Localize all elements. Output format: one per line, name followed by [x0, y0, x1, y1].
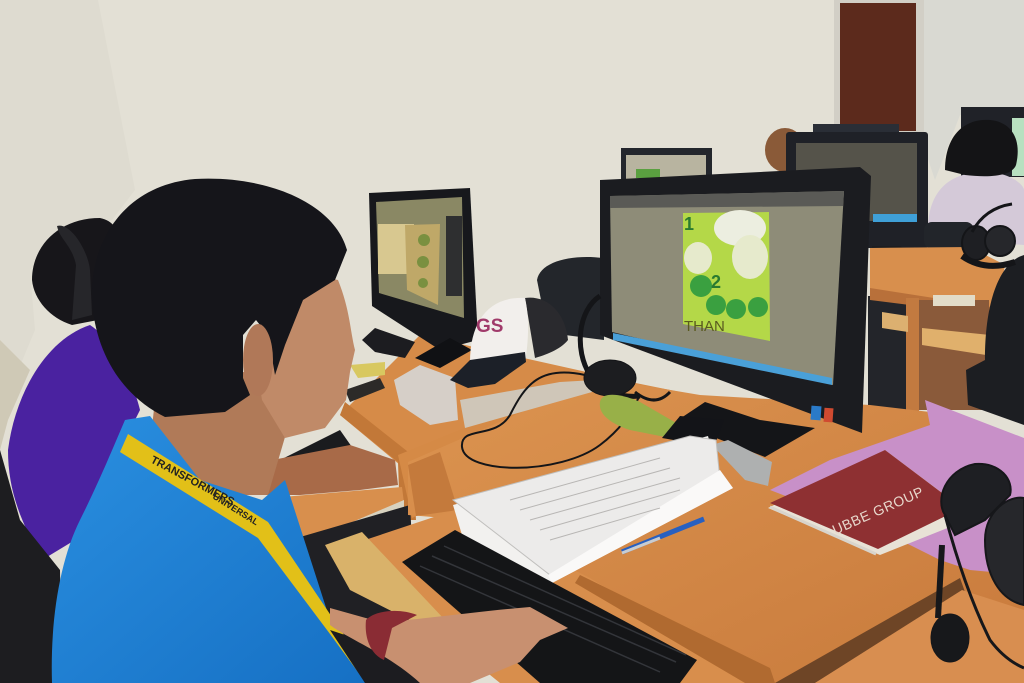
- cap logo: GS: [476, 316, 503, 337]
- notebook label: UBBE GROUP: [830, 483, 926, 538]
- person purple, left: [8, 218, 398, 560]
- keyboard back: [276, 430, 354, 462]
- right desk, background: [868, 247, 1024, 425]
- main monitor: 1: [684, 214, 694, 234]
- desk main foreground: [325, 378, 1024, 683]
- dark floor below the desks: [290, 505, 420, 683]
- left monitor: [362, 188, 478, 368]
- headset foreground right: [931, 464, 1024, 668]
- headphones and cable centre: [462, 296, 670, 468]
- lanyard: TRANSFORMERS: [149, 454, 236, 508]
- headset on right desk: [962, 204, 1015, 266]
- main monitor: 2: [711, 272, 721, 292]
- cap: [450, 298, 568, 388]
- chair back centre: [537, 257, 604, 340]
- back desk centre: [282, 335, 680, 548]
- main monitor: [600, 167, 871, 457]
- main person shirt: [52, 416, 365, 683]
- background monitors and people: [621, 107, 1024, 264]
- keyboard foreground: [402, 530, 697, 683]
- red notebook: [768, 450, 965, 555]
- screen text: THAN: [684, 318, 725, 335]
- papers: [453, 436, 733, 583]
- pen: [622, 519, 704, 553]
- purple folder: [770, 400, 1024, 575]
- lanyard: UNIVERSAL: [211, 491, 261, 528]
- main person ear: [243, 324, 273, 396]
- door: [834, 0, 924, 135]
- main person hair: [92, 179, 347, 417]
- dark chair lower left: [0, 450, 62, 683]
- plastic bag and items: [345, 362, 595, 428]
- green pouch and phone: [600, 395, 772, 486]
- strap and watch: [330, 630, 430, 683]
- main person neck and face: [150, 278, 355, 495]
- main person arm and hand: [330, 607, 568, 683]
- lanyard: [120, 434, 376, 683]
